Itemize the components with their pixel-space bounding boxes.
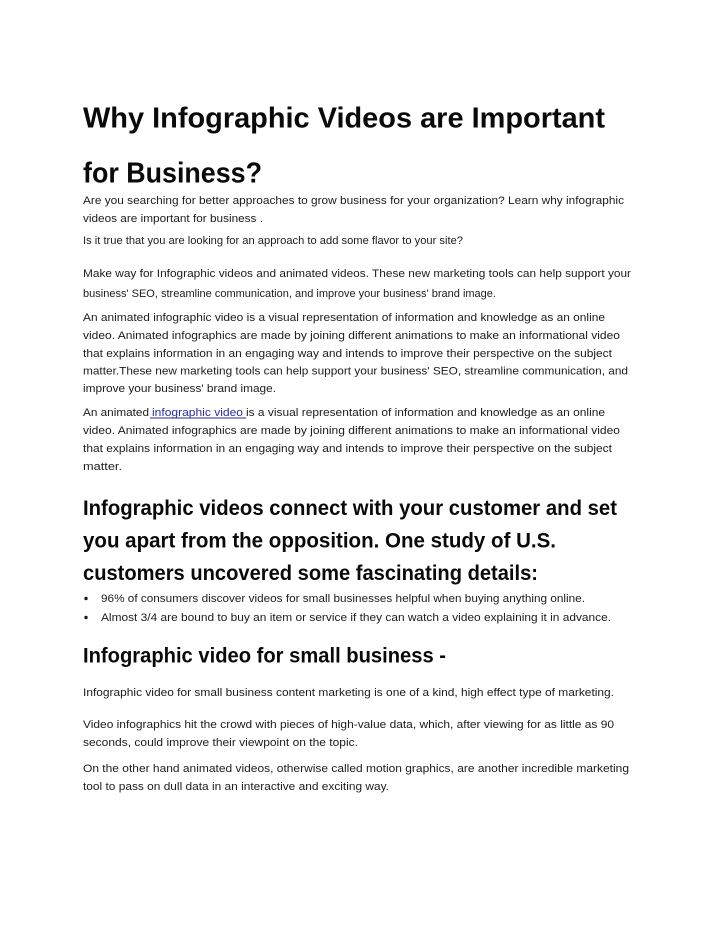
text block: make way: business' SEO, streamline communication, and improve your business' brand image. [83,288,496,300]
text block: video infographics [83,719,614,749]
text block: make way: Make way for Infographic videos and animated videos. These new marketing tools can help support your [83,268,631,280]
bullet list [84,593,611,624]
bullet list: 96% of consumers discover videos for small businesses helpful when buying anything online. [101,593,585,605]
heading: connect with customer: Infographic videos connect with your customer and set [83,497,617,520]
title: Why Infographic Videos are Important [83,102,605,134]
title [83,102,605,190]
text block: make way [83,268,631,300]
text block: animated infographic definition: An animated infographic video is a visual representation of information and knowledge as an online [83,312,605,324]
text block: paragraph with link [83,407,620,473]
title: for Business? [83,158,262,190]
bullet list: Almost 3/4 are bound to buy an item or service if they can watch a video explaining it in advance. [101,612,611,624]
text block: flavor question: Is it true that you are looking for an approach to add some flavor to your site? [83,235,463,247]
text block: motion graphics: On the other hand animated videos, otherwise called motion graphics, are another incredible marketing [83,763,629,775]
heading: connect with customer: you apart from the opposition. One study of U.S. [83,530,556,552]
text block: paragraph with link: is a visual representation of information and knowledge as an online [246,407,605,419]
text block: paragraph with link: that explains information in an engaging way and intends to improve their perspective on the subject [83,443,613,455]
text block: animated infographic definition [83,312,628,395]
text block: animated infographic definition: that explains information in an engaging way and intends to improve their perspective on the subject [83,348,613,360]
heading: connect with customer: customers uncovered some fascinating details: [83,562,538,585]
text block: paragraph with link: matter. [83,461,122,473]
text block: animated infographic definition: video. Animated infographics are made by joining different animations to make an informational video [83,330,620,342]
heading: connect with customer [83,497,617,585]
text block: video infographics: seconds, could improve their viewpoint on the topic. [83,737,358,749]
text block: video infographics: Video infographics hit the crowd with pieces of high-value data, which, after viewing for as little as 90 [83,719,614,731]
text block: content marketing: Infographic video for small business content marketing is one of a kind, high effect type of marketing. [83,687,614,699]
text block: intro question: Are you searching for better approaches to grow business for your organization? Learn why infographic [83,195,624,207]
text block: paragraph with link: video. Animated infographics are made by joining different animations to make an informational video [83,425,620,437]
text block: motion graphics [83,763,629,793]
text block: motion graphics: tool to pass on dull data in an interactive and exciting way. [83,781,389,793]
text block: animated infographic definition: improve your business' brand image. [83,383,276,395]
text block: paragraph with link: An animated [83,407,149,419]
heading: small business: Infographic video for small business - [83,644,446,668]
text block: intro question: videos are important for business . [83,213,263,225]
text block: animated infographic definition: matter.These new marketing tools can help support your business' SEO, streamline communication, and [83,366,628,378]
text block: intro question [83,195,624,225]
link: infographic video: infographic video [152,407,243,419]
